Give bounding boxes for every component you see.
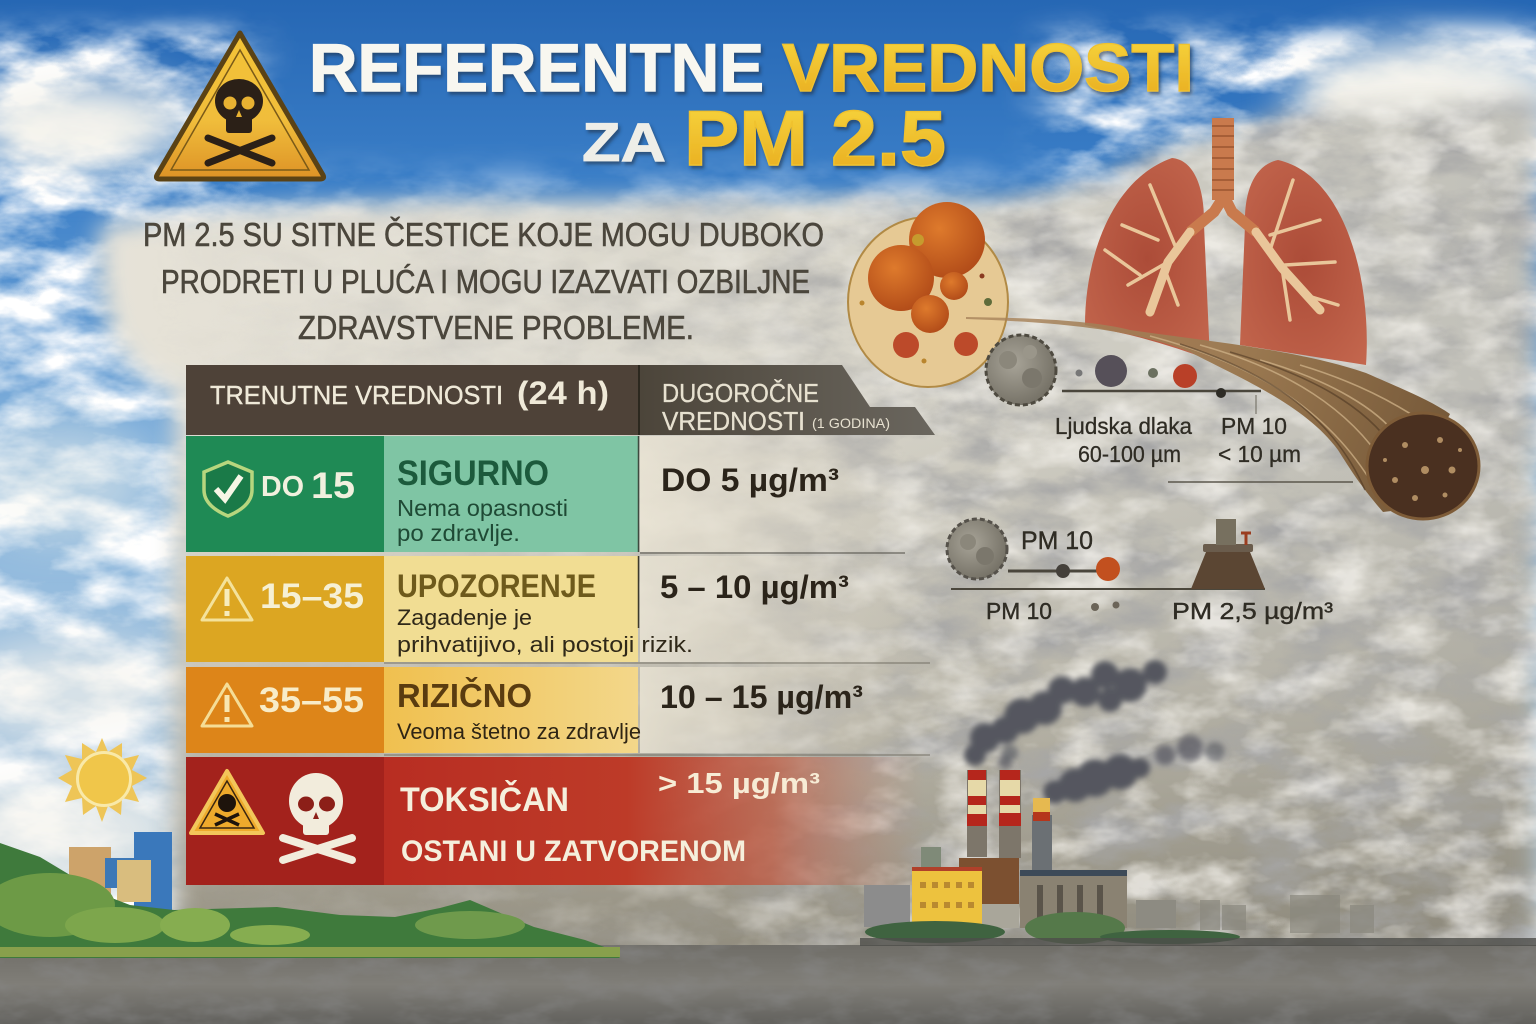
table header: VREDNOSTI (662, 406, 805, 436)
illustration: particle size scale (986, 335, 1353, 482)
illustration: lungs (1085, 118, 1367, 365)
illustration: particle size scale: PM 10 (1221, 413, 1287, 439)
illustration: particle size scale: < 10 µm (1218, 441, 1301, 467)
table header (186, 365, 935, 436)
row: toksičan: OSTANI U ZATVORENOM (401, 835, 746, 868)
intro text (143, 216, 824, 346)
icon: skull and crossbones (283, 773, 352, 860)
illustration: PM 10 comparison: PM 2,5 µg/m³ (1172, 598, 1333, 624)
row: upozorenje: prihvatijivo, ali postoji rizik. (397, 632, 693, 657)
table: PM 2.5 reference values (186, 365, 935, 885)
illustration: particle size scale: 60-100 µm (1078, 441, 1181, 467)
row: upozorenje: UPOZORENJE (397, 568, 596, 604)
icon: warning triangle (202, 578, 252, 620)
row: toksičan: > 15 µg/m³ (658, 768, 820, 800)
row: sigurno: DO 5 µg/m³ (661, 462, 839, 498)
row: upozorenje: 5 – 10 µg/m³ (660, 569, 849, 605)
intro text: PM 2.5 SU SITNE ČESTICE KOJE MOGU DUBOKO (143, 216, 824, 253)
row: upozorenje: 15–35 (260, 577, 364, 616)
illustration: green landscape and city (0, 832, 620, 958)
row: sigurno: 15 (311, 465, 355, 506)
illustration: sun (58, 738, 147, 822)
title: PM 2.5 (684, 94, 946, 182)
table header: (24 h) (517, 375, 609, 411)
illustration: PM 10 comparison (947, 519, 1333, 624)
row: sigurno (186, 436, 910, 553)
title: ZA (582, 111, 666, 173)
row: rizično: 10 – 15 µg/m³ (660, 679, 863, 715)
row: upozorenje: Zagadenje je (397, 605, 532, 630)
illustration: inhaled particle tube (966, 317, 1479, 519)
row: toksičan (186, 757, 924, 885)
illustration: PM 10 comparison: PM 10 (986, 598, 1052, 624)
title: REFERENTNE (309, 30, 764, 106)
intro text: PRODRETI U PLUĆA I MOGU IZAZVATI OZBILJNE (161, 263, 810, 300)
warning sign with skull (156, 33, 324, 179)
row: rizično (186, 667, 930, 755)
illustration: factory with smoke (860, 660, 1536, 946)
row: sigurno: DO (261, 471, 304, 503)
row: rizično: 35–55 (259, 681, 364, 720)
title (309, 30, 1194, 182)
row: rizično: RIZIČNO (397, 676, 532, 714)
row: sigurno: po zdravlje. (397, 520, 520, 546)
row: sigurno: Nema opasnosti (397, 495, 568, 521)
table header: TRENUTNE VREDNOSTI (210, 380, 503, 410)
intro text: ZDRAVSTVENE PROBLEME. (298, 309, 694, 346)
illustration: PM 10 comparison: PM 10 (1021, 527, 1093, 555)
row: upozorenje (186, 556, 930, 663)
ground (0, 945, 1536, 1024)
table header: DUGOROČNE (662, 378, 819, 408)
row: toksičan: TOKSIČAN (400, 780, 569, 819)
illustration: magnified particles circle (848, 202, 1008, 387)
icon: small skull sign (191, 771, 263, 833)
title: VREDNOSTI (782, 30, 1194, 106)
row: rizično: Veoma štetno za zdravlje (397, 719, 641, 744)
table header: (1 GODINA) (812, 415, 890, 431)
icon: shield check (204, 462, 252, 516)
icon: warning triangle (202, 684, 252, 726)
illustration: particle size scale: Ljudska dlaka (1055, 413, 1192, 439)
row: sigurno: SIGURNO (397, 454, 549, 493)
